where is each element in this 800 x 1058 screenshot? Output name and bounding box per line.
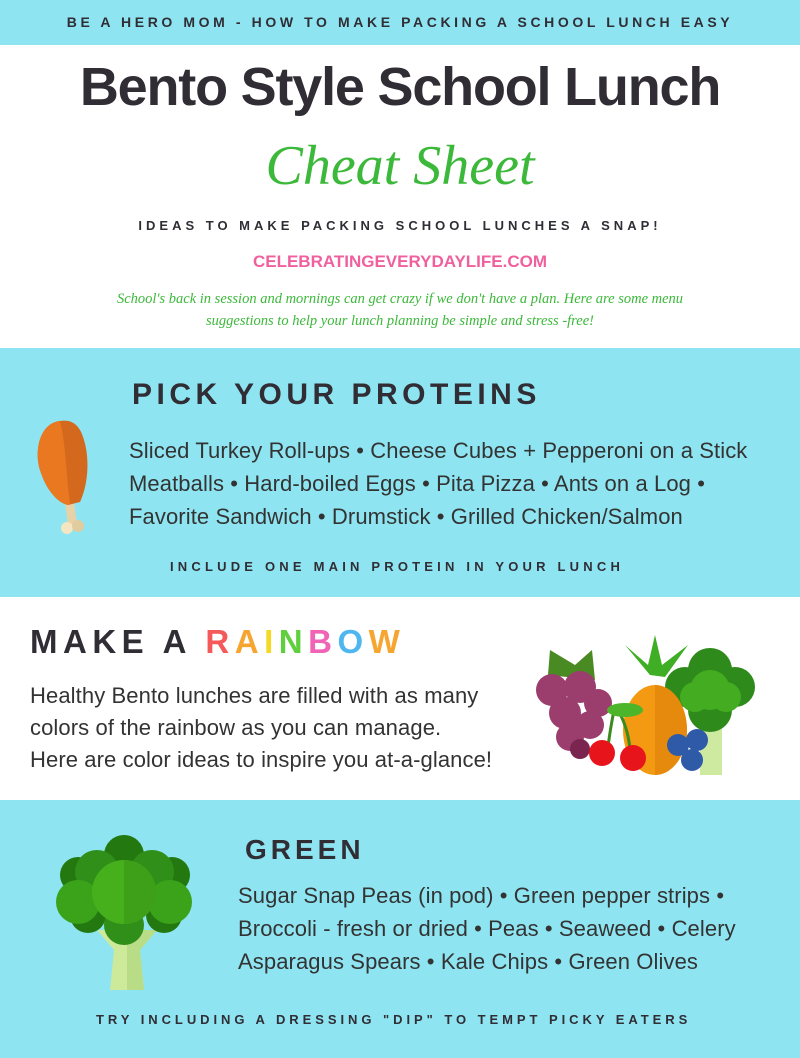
grapes (548, 650, 595, 680)
panel: proteins (0, 348, 800, 597)
top band text: BE A HERO MOM - HOW TO MAKE PACKING A SCHOOL LUNCH EASY (67, 14, 733, 30)
intro paragraph: suggestions to help your lunch planning be simple and stress -free! (206, 313, 594, 329)
intro paragraph: School's back in session and mornings can get crazy if we don't have a plan. Here are some menu (117, 291, 683, 307)
website url: CELEBRATINGEVERYDAYLIFE.COM (253, 252, 547, 271)
title: Bento Style School Lunch (80, 57, 720, 117)
protein list: Sliced Turkey Roll-ups • Cheese Cubes + Pepperoni on a Stick (129, 438, 747, 463)
green list (238, 883, 736, 974)
protein tip: INCLUDE ONE MAIN PROTEIN IN YOUR LUNCH (170, 559, 624, 574)
protein list (129, 438, 748, 529)
panel: green (0, 800, 800, 1058)
cherries (608, 705, 630, 750)
rainbow paragraph: colors of the rainbow as you can manage. (30, 715, 441, 740)
heading: pick your proteins: PICK YOUR PROTEINS (132, 378, 541, 411)
rainbow paragraph: Healthy Bento lunches are filled with as many (30, 683, 478, 708)
icon: drumstick (38, 420, 88, 534)
green list: Broccoli - fresh or dried • Peas • Seaweed • Celery (238, 916, 736, 941)
top band (0, 0, 800, 45)
rainbow paragraph (30, 683, 492, 772)
green list: Asparagus Spears • Kale Chips • Green Olives (238, 949, 698, 974)
pineapple (625, 635, 688, 677)
blueberries (667, 729, 708, 771)
intro paragraph (117, 291, 683, 329)
subtitle: cheat sheet: Cheat Sheet (265, 135, 535, 197)
heading: green: GREEN (245, 834, 365, 865)
icon: broccoli (56, 835, 192, 990)
green list: Sugar Snap Peas (in pod) • Green pepper strips • (238, 883, 724, 908)
rainbow paragraph: Here are color ideas to inspire you at-a-glance! (30, 747, 492, 772)
green tip: TRY INCLUDING A DRESSING "DIP" TO TEMPT PICKY EATERS (96, 1012, 691, 1027)
heading: make a rainbow: MAKE A RAINBOW (30, 623, 405, 660)
tagline: IDEAS TO MAKE PACKING SCHOOL LUNCHES A SNAP! (138, 218, 662, 233)
protein list: Meatballs • Hard-boiled Eggs • Pita Pizza • Ants on a Log • (129, 471, 705, 496)
icon: fruit and vegetable cluster (536, 635, 755, 775)
protein list: Favorite Sandwich • Drumstick • Grilled Chicken/Salmon (129, 504, 683, 529)
broccoli (700, 715, 722, 775)
